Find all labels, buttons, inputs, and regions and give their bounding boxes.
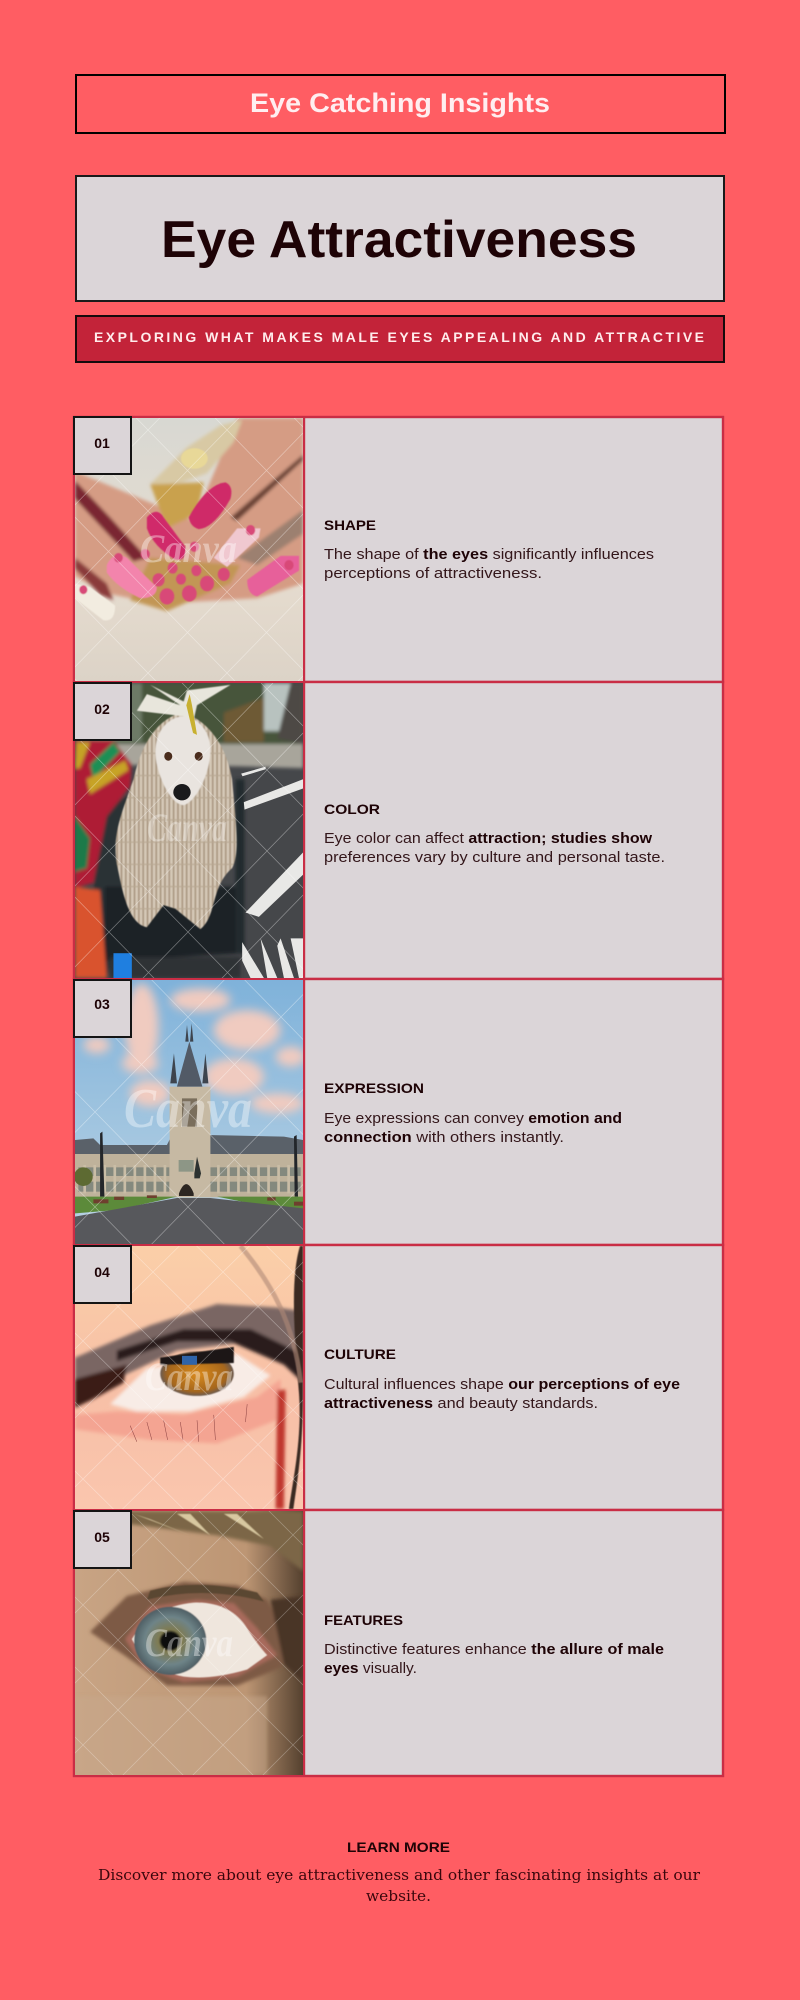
text block: features: Distinctive features enhance the allure of male xyxy=(324,1642,664,1658)
text block: shape: The shape of the eyes significantly influences xyxy=(324,547,654,563)
text block: culture: CULTURE xyxy=(324,1346,396,1362)
badge 01: 01 xyxy=(94,435,110,451)
badge 03 xyxy=(74,980,131,1037)
badge 02: 02 xyxy=(94,701,110,717)
text block: expression: Eye expressions can convey emotion and xyxy=(324,1111,622,1127)
photo 1: jewelled nails xyxy=(75,418,303,681)
footer: learn more: Discover more about eye attractiveness and other fascinating insights at our xyxy=(98,1868,700,1884)
photo 3: palace under blue sky xyxy=(74,980,306,1244)
text block: shape xyxy=(324,517,654,582)
footer: learn more: LEARN MORE xyxy=(347,1839,450,1855)
photo 4: brown eye close-up: Canva xyxy=(145,1354,233,1399)
text block: features xyxy=(324,1612,664,1677)
text block: features: FEATURES xyxy=(324,1612,403,1628)
title panel: Eye Attractiveness xyxy=(76,176,724,301)
text block: culture xyxy=(324,1346,680,1412)
photo 5: blue-grey eye close-up: Canva xyxy=(145,1620,233,1665)
text block: expression xyxy=(324,1080,622,1146)
text block: features: eyes visually. xyxy=(324,1661,417,1677)
badge 04: 04 xyxy=(94,1264,110,1280)
subtitle banner: EXPLORING WHAT MAKES MALE EYES APPEALING AND ATTRACTIVE xyxy=(94,329,704,345)
photo 1: jewelled nails: Canva xyxy=(140,526,237,571)
badge 05 xyxy=(74,1511,131,1568)
badge 04 xyxy=(74,1246,131,1303)
text block: color: COLOR xyxy=(324,801,380,817)
photo 3: palace under blue sky: Canva xyxy=(124,1078,252,1140)
subtitle banner xyxy=(76,316,724,362)
photo 5: blue-grey eye close-up xyxy=(75,1511,303,1775)
footer: learn more: website. xyxy=(366,1889,431,1905)
title panel: Eye Attractiveness: Eye Attractiveness xyxy=(161,211,637,269)
footer: learn more xyxy=(98,1839,700,1905)
header banner: Eye Catching Insights xyxy=(76,75,725,133)
badge 02 xyxy=(74,683,131,740)
badge 03: 03 xyxy=(94,996,110,1012)
text block: culture: Cultural influences shape our perceptions of eye xyxy=(324,1377,680,1393)
badge 01 xyxy=(74,417,131,474)
text block: shape: perceptions of attractiveness. xyxy=(324,566,542,582)
text block: expression: EXPRESSION xyxy=(324,1080,424,1096)
header banner: Eye Catching Insights: Eye Catching Insights xyxy=(250,88,550,118)
badge 05: 05 xyxy=(94,1529,110,1545)
photo 2: poodle on chair xyxy=(75,683,303,978)
panel: row outlines xyxy=(74,417,723,1776)
text block: color: preferences vary by culture and personal taste. xyxy=(324,850,665,866)
text block: culture: attractiveness and beauty standards. xyxy=(324,1396,598,1412)
text block: color: Eye color can affect attraction; studies show xyxy=(324,831,653,847)
text block: color xyxy=(324,801,665,866)
photo 2: poodle on chair: Canva xyxy=(147,805,227,850)
photo 4: brown eye close-up xyxy=(75,1246,303,1509)
text block: shape: SHAPE xyxy=(324,517,376,533)
text block: expression: connection with others instantly. xyxy=(324,1130,564,1146)
